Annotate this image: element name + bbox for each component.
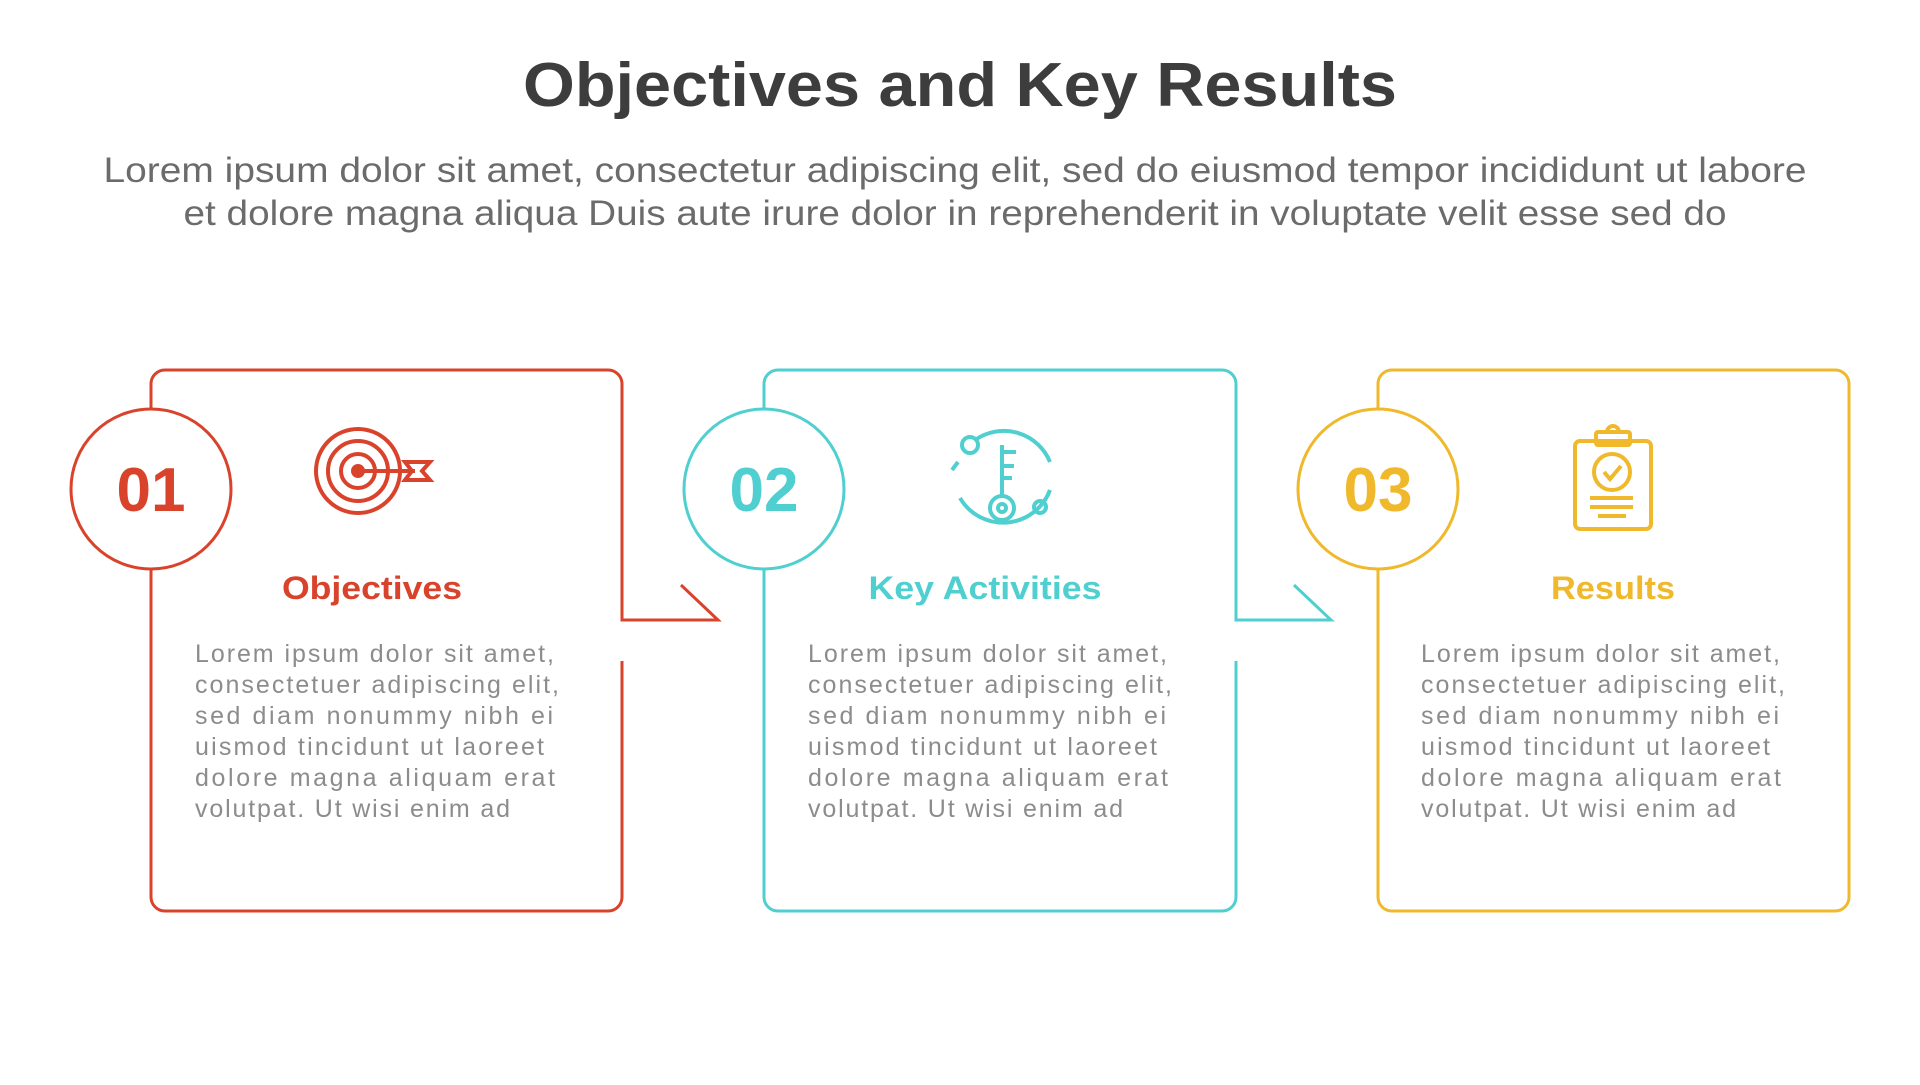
panel: key activities: dolore magna aliquam erat xyxy=(808,764,1168,792)
title: Objectives and Key Results xyxy=(523,51,1397,120)
panel: key activities: Lorem ipsum dolor sit amet, xyxy=(808,640,1167,668)
subtitle: et dolore magna aliqua Duis aute irure dolor in reprehenderit in voluptate velit esse sed do xyxy=(184,194,1726,233)
panel: key activities: uismod tincidunt ut laoreet xyxy=(808,733,1157,761)
panel: key activities xyxy=(684,370,1331,911)
panel: results: uismod tincidunt ut laoreet xyxy=(1421,733,1770,761)
panel: results: 03 xyxy=(1344,456,1412,525)
panel: objectives xyxy=(71,370,718,911)
panel: key activities: sed diam nonummy nibh ei xyxy=(808,702,1166,730)
panel: objectives: uismod tincidunt ut laoreet xyxy=(195,733,544,761)
subtitle: Lorem ipsum dolor sit amet, consectetur adipiscing elit, sed do eiusmod tempor incididunt ut labore xyxy=(104,151,1806,190)
panel: objectives: Objectives xyxy=(282,570,462,606)
panel: results: Lorem ipsum dolor sit amet, xyxy=(1421,640,1780,668)
panel: objectives: consectetuer adipiscing elit, xyxy=(195,671,559,699)
panel: key activities: 02 xyxy=(730,456,798,525)
panel: key activities: consectetuer adipiscing elit, xyxy=(808,671,1172,699)
panel: key activities: Key Activities xyxy=(868,570,1102,606)
icon: clipboard xyxy=(1575,426,1651,529)
icon: key cycle xyxy=(952,431,1050,523)
panel: results: consectetuer adipiscing elit, xyxy=(1421,671,1785,699)
panel: objectives: Lorem ipsum dolor sit amet, xyxy=(195,640,554,668)
panel: objectives: 01 xyxy=(117,456,185,525)
panel: objectives: dolore magna aliquam erat xyxy=(195,764,555,792)
panel: results: dolore magna aliquam erat xyxy=(1421,764,1781,792)
panel: results: volutpat. Ut wisi enim ad xyxy=(1421,795,1736,823)
panel: results xyxy=(1298,370,1849,911)
panel: objectives: sed diam nonummy nibh ei xyxy=(195,702,553,730)
panel: objectives: volutpat. Ut wisi enim ad xyxy=(195,795,510,823)
icon: target xyxy=(316,429,430,513)
panel: results: Results xyxy=(1551,570,1675,606)
panel: results: sed diam nonummy nibh ei xyxy=(1421,702,1779,730)
subtitle xyxy=(104,151,1806,233)
panel: key activities: volutpat. Ut wisi enim ad xyxy=(808,795,1123,823)
